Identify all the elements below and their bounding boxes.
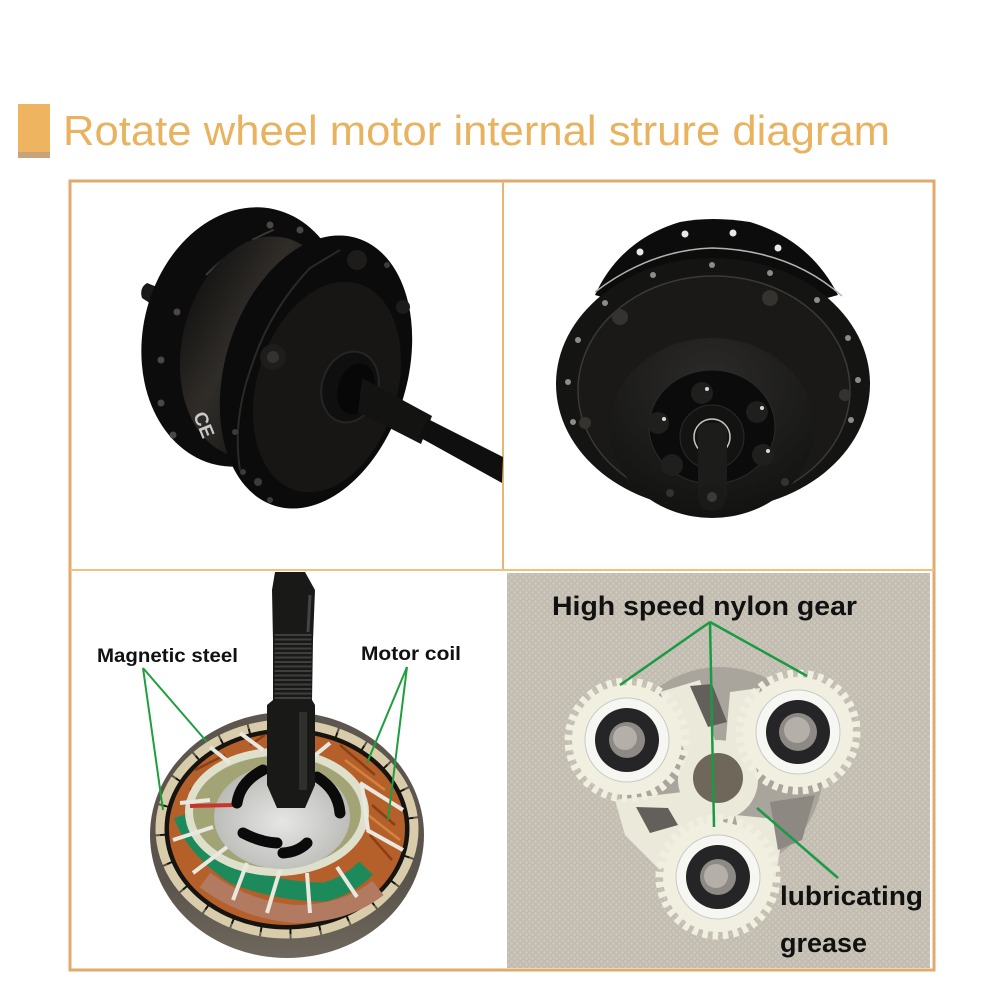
coil texture <box>190 735 400 860</box>
rim slots and holes <box>158 222 304 438</box>
centre mount ring <box>189 752 365 872</box>
fabric background <box>507 573 930 968</box>
label: lubricating grease: grease <box>780 928 867 958</box>
leader lines <box>620 622 838 878</box>
motor axle left <box>141 283 172 311</box>
panel: planetary gears <box>507 573 930 968</box>
motor dome <box>228 263 426 511</box>
motor axle right <box>358 378 432 444</box>
metal patches <box>636 684 815 850</box>
hub bolts <box>647 382 774 476</box>
motor rear flange <box>116 186 374 488</box>
label: lubricating grease: lubricating <box>780 881 923 911</box>
axle ring <box>694 419 730 455</box>
motor hub <box>313 344 387 430</box>
outer shell <box>150 712 424 958</box>
flange screws <box>579 290 851 497</box>
magnetic steel ring <box>160 724 414 934</box>
gear: left <box>569 682 685 798</box>
axle <box>267 572 315 808</box>
title: Rotate wheel motor internal strure diagram <box>63 107 890 154</box>
grease covering <box>615 680 785 880</box>
panel: motor side view <box>116 186 503 532</box>
label: high speed nylon gear: High speed nylon gear <box>552 591 858 621</box>
red wires <box>190 805 235 806</box>
label: magnetic steel: Magnetic steel <box>97 646 238 667</box>
axle <box>698 423 727 511</box>
label: motor coil: Motor coil <box>361 644 461 665</box>
leader lines <box>143 667 407 820</box>
coil ties <box>173 733 403 913</box>
stator coils <box>169 733 405 925</box>
gear: bottom <box>660 819 776 935</box>
motor front flange <box>188 212 444 532</box>
dome <box>610 338 814 518</box>
hub slots <box>237 770 340 853</box>
panel: motor front view <box>556 219 870 518</box>
hub plate <box>649 370 775 484</box>
flange bolts <box>232 250 410 503</box>
front flange <box>556 258 870 510</box>
flange holes <box>565 262 861 425</box>
gear: right <box>740 674 856 790</box>
silver hub <box>214 765 350 869</box>
panel: photo frame <box>70 181 934 970</box>
carrier plate <box>617 667 823 873</box>
rim holes <box>636 230 782 256</box>
motor body <box>159 220 361 474</box>
rear rim <box>595 219 838 330</box>
green circuit board <box>183 815 366 892</box>
sun gear <box>678 740 758 820</box>
panel: motor interior <box>97 572 461 958</box>
lower coil band <box>205 880 378 914</box>
CE mark: CE <box>188 409 218 441</box>
